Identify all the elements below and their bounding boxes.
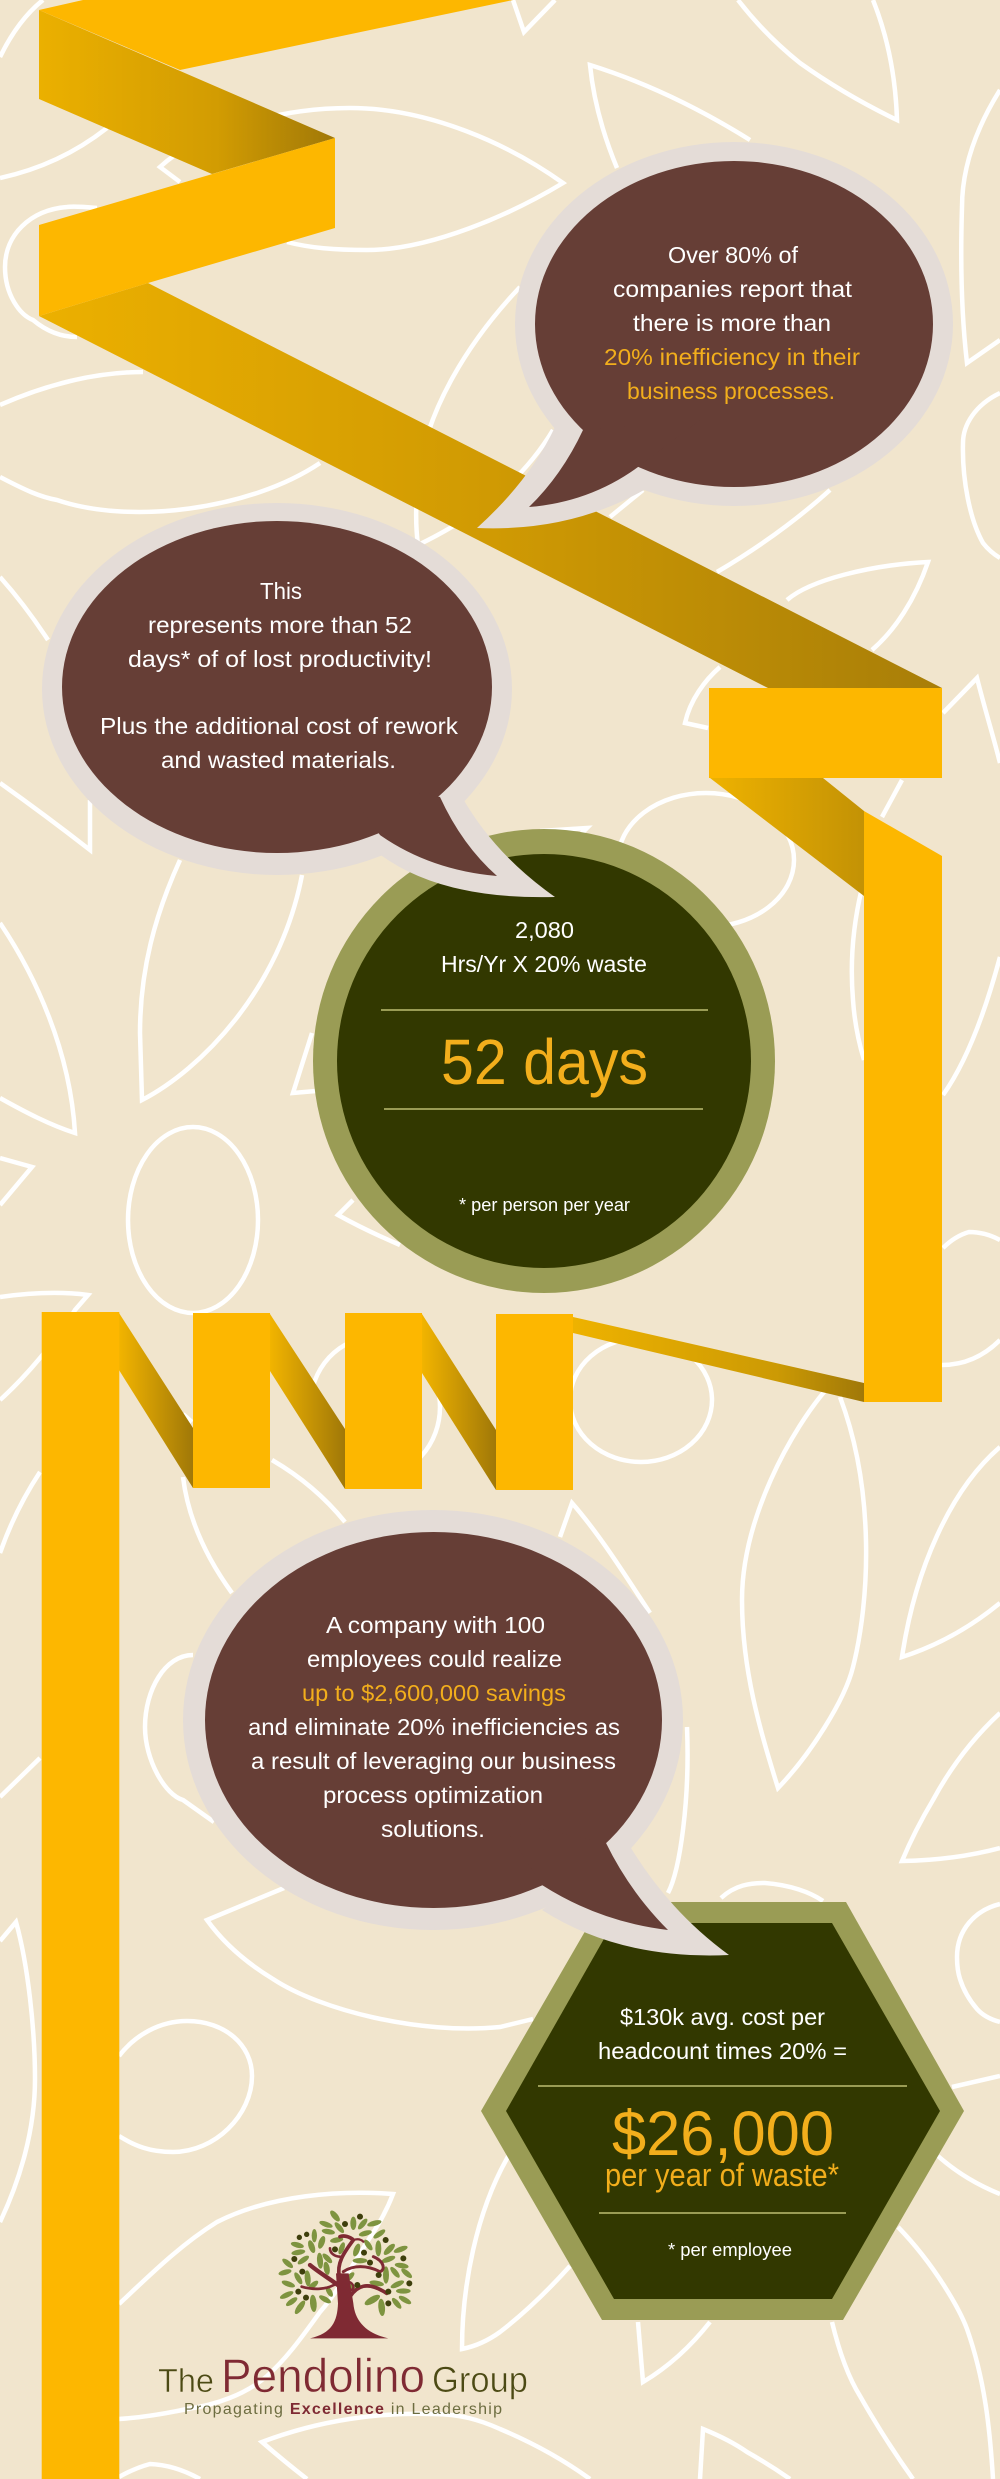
- speech bubble: savings potential: [183, 1510, 729, 1955]
- hexagon text: formula: headcount times 20% =: [598, 2038, 847, 2064]
- bubble text: inefficiency statement: there is more than: [633, 310, 831, 336]
- bubble text: lost productivity: This: [260, 578, 302, 604]
- logo wordmark: [158, 2349, 528, 2402]
- logo: The Pendolino Group: [158, 2209, 528, 2418]
- speech bubble: 52 days lost productivity: [42, 503, 555, 897]
- ribbon: top zigzag and long diagonal: [39, 0, 942, 688]
- hexagon text: formula: $130k avg. cost per: [620, 2004, 825, 2030]
- bubble text: inefficiency statement: Over 80% of: [668, 242, 799, 268]
- hexagon: cost per employee: [481, 1902, 964, 2320]
- footnote: per person per year: * per person per year: [459, 1195, 630, 1215]
- big number: $26,000: $26,000: [612, 2099, 834, 2169]
- bubble text: inefficiency statement: business processes.: [627, 378, 835, 404]
- bubble text: inefficiency statement: 20% inefficiency in their: [604, 344, 860, 370]
- circle text: formula: [441, 917, 647, 977]
- hexagon text: formula: [598, 2004, 847, 2064]
- circle: 52 days calculation: [313, 829, 775, 1293]
- bubble text: lost productivity: [100, 578, 459, 773]
- bubble text: savings: up to $2,600,000 savings: [302, 1680, 566, 1706]
- bubble text: savings: and eliminate 20% inefficiencies as: [248, 1714, 620, 1740]
- circle text: formula: 2,080: [515, 917, 574, 943]
- bubble text: inefficiency statement: companies report that: [613, 276, 853, 302]
- logo wordmark: The: [158, 2362, 214, 2399]
- bubble text: lost productivity: days* of of lost productivity!: [128, 646, 432, 672]
- bubble text: savings: solutions.: [381, 1816, 485, 1842]
- ribbon: right side fold and column: [573, 688, 942, 1402]
- ribbon: lower zigzag and left column: [42, 1312, 573, 2479]
- subheading: per year of waste: per year of waste*: [605, 2157, 839, 2193]
- big number: 52 days: 52 days: [441, 1026, 648, 1098]
- bubble text: lost productivity: Plus the additional cost of rework: [100, 713, 459, 739]
- speech bubble: 80% of companies: [477, 142, 953, 528]
- bubble text: savings: [248, 1612, 620, 1842]
- bubble text: savings: process optimization: [323, 1782, 543, 1808]
- bubble text: savings: employees could realize: [307, 1646, 562, 1672]
- circle text: formula: Hrs/Yr X 20% waste: [441, 951, 647, 977]
- bubble text: savings: A company with 100: [326, 1612, 545, 1638]
- logo wordmark: Group: [432, 2359, 528, 2400]
- bubble text: savings: a result of leveraging our business: [251, 1748, 616, 1774]
- footnote: per employee: * per employee: [668, 2240, 792, 2260]
- icon: olive tree: [278, 2209, 413, 2338]
- bubble text: lost productivity: and wasted materials.: [161, 747, 396, 773]
- logo tagline: Propagating Excellence in Leadership: [184, 2401, 502, 2418]
- bubble text: lost productivity: represents more than 52: [148, 612, 412, 638]
- logo wordmark: Pendolino: [221, 2349, 425, 2402]
- bubble text: inefficiency statement: [604, 242, 860, 404]
